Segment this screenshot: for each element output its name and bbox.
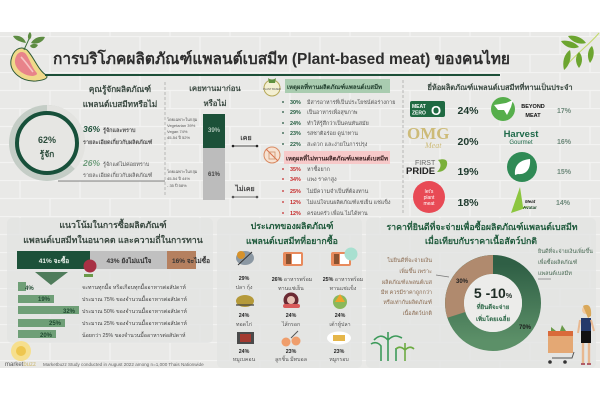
brand: Meat Zero: O xyxy=(431,103,441,118)
labels: product types: 23% xyxy=(334,349,345,355)
bar labels: จะทานทุกมื้อ หรือเกือบทุกมื้ออาหารต่อสัปดาห์ xyxy=(82,283,186,291)
labels: product types: 29% xyxy=(239,276,250,282)
list: reasons not to eat: 34% xyxy=(290,177,301,183)
list: reasons not to eat: 12% xyxy=(290,211,301,217)
label: no: ไม่เคย xyxy=(234,184,255,193)
note: never eaten groups: - 35 ปี 58% xyxy=(167,183,187,188)
list: reasons to eat: ทำให้รู้สึกว่าเป็นคนทันสมัย xyxy=(307,119,369,127)
donut: 62 percent aware: 62% xyxy=(38,135,56,145)
labels: product types: ทานแช่แข็ง xyxy=(330,284,357,292)
labels: product types: ไส้กรอก xyxy=(281,320,300,328)
stacked bar: ever eaten xyxy=(203,114,225,200)
stat: 26 percent: รู้จักแต่ไม่ค่อยทราบ xyxy=(103,161,150,168)
panel: awareness: แพลนต์เบสมีทหรือไม่ xyxy=(83,99,157,109)
heading: price: ราคาที่ยินดีที่จะจ่ายเพื่อซื้อผลิตภัณฑ์แพลนต์เบสมีท xyxy=(386,220,578,232)
bar values: 19% xyxy=(38,297,51,303)
bar labels: ประมาณ 75% ของจำนวนมื้ออาหารต่อสัปดาห์ xyxy=(82,295,187,303)
note: never eaten groups: โดยเฉพาะในกลุ่ม xyxy=(167,169,198,175)
donut center text: เพิ่มโดยเฉลี่ย xyxy=(476,314,510,323)
donut: willingness to pay: 70% xyxy=(519,325,532,331)
note: ever eaten groups: 45-54 ปี 52% xyxy=(167,135,190,140)
brand percentages: 14% xyxy=(556,200,571,207)
icon: woman shopper xyxy=(578,305,594,364)
brand percentages: 15% xyxy=(557,169,572,176)
labels: product types: หมูกรอบ xyxy=(329,357,349,363)
list: reasons not to eat: 35% xyxy=(290,167,301,173)
panel: product types: แพลนต์เบสมีทที่อยากซื้อ xyxy=(246,234,338,246)
brand: Harvest Gourmet: Harvest xyxy=(504,129,539,140)
brand: First Pride xyxy=(406,159,447,177)
arrow: down xyxy=(35,272,68,285)
bar labels: ประมาณ 25% ของจำนวนมื้ออาหารต่อสัปดาห์ xyxy=(82,319,187,327)
list: reasons to eat: 30% xyxy=(290,100,301,106)
stacked bar: ever eaten: 61% xyxy=(208,172,221,178)
stat: 26 percent: รายละเอียดเกี่ยวกับผลิตภัณฑ์ xyxy=(83,171,153,179)
list: reasons to eat: มีสารอาหารที่เป็นประโยชน์ต่อร่างกาย xyxy=(307,98,395,106)
panel: reasons xyxy=(263,78,395,217)
labels: product types: ทานแช่เย็น xyxy=(278,284,304,292)
brand: Beyond Meat: BEYOND xyxy=(521,104,545,110)
brand percentages: 17% xyxy=(557,108,572,115)
stat: 26 percent xyxy=(82,158,153,179)
labels: product types: 26% อาหารพร้อม xyxy=(272,276,312,283)
heading: awareness: คุณรู้จักผลิตภัณฑ์ xyxy=(89,84,151,95)
heading: future purchase: แนวโน้มในการซื้อผลิตภัณฑ์ xyxy=(59,218,167,230)
note: ever eaten groups: โดยเฉพาะในกลุ่ม xyxy=(167,117,198,123)
list: reasons to eat: 23% xyxy=(290,131,301,137)
list: reasons not to eat: 12% xyxy=(290,200,301,206)
brand: OMG Meat: Meat xyxy=(424,141,442,150)
stat: 36 percent: รู้จักและทราบ xyxy=(103,126,136,135)
panel: ever eaten: หรือไม่ xyxy=(203,98,227,108)
bar values: 32% xyxy=(63,309,76,315)
bars: eating frequency xyxy=(18,282,79,338)
callout: willing: เพื่อซื้อผลิตภัณฑ์ xyxy=(538,258,578,266)
list: reasons to eat: 29% xyxy=(290,110,301,116)
note: never eaten groups: 45-54 ปี 44% xyxy=(167,176,190,181)
bar labels: น้อยกว่า 25% ของจำนวนมื้ออาหารต่อสัปดาห์ xyxy=(82,331,186,339)
icon: fried chicken xyxy=(236,295,254,307)
panel: ever eaten xyxy=(167,84,258,200)
brand: Meat Avatar xyxy=(511,187,537,213)
list: reasons not to eat: ไม่มีความจำเป็นที่ต้องทาน xyxy=(306,187,369,195)
icon: frozen ready meal xyxy=(331,248,358,266)
list: reasons not to eat: 25% xyxy=(290,189,301,195)
callout: not willing: เนื้อสัตว์ปกติ xyxy=(403,309,432,317)
icons: product types xyxy=(236,248,358,346)
icon: plants xyxy=(371,332,414,361)
icon: meat xyxy=(84,260,96,277)
heading: ever eaten: เคยทานมาก่อน xyxy=(189,84,241,93)
brand: Meat Avatar: Avatar xyxy=(523,205,537,210)
label: yes: เคย xyxy=(240,135,252,142)
bar values: 25% xyxy=(49,321,62,327)
note: ever eaten groups: Vegan 74% xyxy=(167,129,188,134)
labels: product types: 24% xyxy=(286,313,297,319)
donut center text: 5 -10% xyxy=(474,285,513,301)
icon: shopping cart xyxy=(548,325,574,364)
list: reasons to eat: สะดวก และง่ายในการปรุง xyxy=(307,140,368,148)
callout: willing: แพลนต์เบสมีท xyxy=(538,270,572,277)
icon: bacon xyxy=(237,332,254,344)
icon: meatballs xyxy=(282,331,300,346)
bar values: 4% xyxy=(25,286,34,292)
brand percentages: 19% xyxy=(457,166,479,178)
callout: willing xyxy=(537,247,593,277)
logo: marketbuzz: marketbuzz xyxy=(5,362,36,368)
labels: product types: 24% xyxy=(239,349,250,355)
stacked bar: purchase intent: 43% ยังไม่แน่ใจ xyxy=(107,256,152,265)
list: reasons to eat xyxy=(282,98,395,148)
panel: future purchase xyxy=(17,218,210,339)
icon: fish and shrimp xyxy=(236,251,254,265)
labels: product types: 24% xyxy=(239,313,250,319)
brand percentages: 20% xyxy=(457,136,479,148)
brand: Let's Plant Meat xyxy=(413,181,445,213)
brand: Beyond Meat: MEAT xyxy=(525,113,541,119)
brand: Beyond Meat xyxy=(491,97,545,121)
panel: price xyxy=(371,220,594,364)
panel: future purchase: แพลนต์เบสมีทในอนาคต และความถี่ในการทาน xyxy=(23,233,203,245)
labels: product types: ปลา กุ้ง xyxy=(236,284,253,291)
list: reasons not to eat xyxy=(282,165,391,217)
brand percentages xyxy=(457,105,572,209)
donut: 62 percent aware xyxy=(9,105,85,181)
brand: First Pride: PRIDE xyxy=(406,166,435,177)
brand: Meat Zero: ZERO xyxy=(412,110,426,116)
stacked bar: ever eaten: 39% xyxy=(208,128,221,134)
donut: 62 percent aware: รู้จัก xyxy=(40,149,54,160)
list: reasons not to eat: ไม่แน่ใจบนผลิตภัณฑ์แช่เย็น แช่แข็ง xyxy=(306,198,391,206)
callout: not willing: ไม่ยินดีที่จะจ่ายเงิน xyxy=(386,256,432,264)
callout: not willing: เพิ่มขึ้น เพราะ xyxy=(399,267,432,275)
list: reasons to eat: 22% xyxy=(290,142,301,148)
labels: product types: ลูกชิ้น มีทบอล xyxy=(275,355,307,363)
icon: no plant based xyxy=(264,147,280,163)
title underline xyxy=(45,74,500,76)
heading: product types: ประเภทของผลิตภัณฑ์ xyxy=(251,220,333,231)
stat: 36 percent xyxy=(83,124,153,146)
callout: not willing: มีท ควรมีราคาถูกกว่า xyxy=(381,289,432,296)
labels: product types: 23% xyxy=(286,349,297,355)
brand: Harvest Gourmet: Gourmet xyxy=(509,140,533,146)
icon: fish tofu xyxy=(333,294,347,309)
stacked bar: purchase intent: 41% จะซื้อ xyxy=(39,255,69,265)
source note: Marketbuzz Study conducted in August 2022 among n=1,000 Thais Nationwide xyxy=(43,362,204,367)
donut: willingness to pay xyxy=(445,255,532,342)
labels: product types: 24% xyxy=(335,313,346,319)
brand percentages: 24% xyxy=(457,105,479,117)
list: reasons to eat: 24% xyxy=(290,121,301,127)
list: reasons not to eat: หาซื้อยาก xyxy=(307,165,330,173)
donut center text xyxy=(474,285,513,323)
icon: plant based badge: PLANT BASED xyxy=(263,87,281,91)
brand percentages: 18% xyxy=(457,197,479,209)
list: reasons not to eat: แพง ราคาสูง xyxy=(307,176,337,183)
brand: OMG Meat: OMG xyxy=(407,124,450,143)
labels: product types xyxy=(233,276,363,363)
labels: product types: ทอดไก่ xyxy=(236,320,252,328)
labels: product types: เต้าหู้ปลา xyxy=(329,321,351,328)
bar values: 20% xyxy=(40,333,53,339)
bar labels: ประมาณ 50% ของจำนวนมื้ออาหารต่อสัปดาห์ xyxy=(82,307,187,315)
stacked bar: purchase intent: 16% จะไม่ซื้อ xyxy=(172,255,210,265)
icon: chilled ready meal xyxy=(283,252,303,266)
list: reasons to eat: รสชาติอร่อย ดูน่าทาน xyxy=(307,130,358,137)
brand: Meat Zero xyxy=(410,101,445,118)
brand: First Pride: FIRST xyxy=(415,160,436,167)
note: ever eaten groups: Vegetarian 39% xyxy=(167,123,196,128)
stat: 26 percent: 26% xyxy=(82,158,100,168)
panel: brands xyxy=(406,81,573,213)
list: reasons to eat: เป็นอาหารเพื่อสุขภาพ xyxy=(307,108,358,116)
donut: willingness to pay: 30% xyxy=(456,279,469,285)
brand percentages: 16% xyxy=(557,139,572,146)
panel: awareness xyxy=(9,84,165,181)
brand: Never Meat xyxy=(507,152,537,182)
panel: price background xyxy=(366,218,596,368)
panel: product types background xyxy=(217,218,362,368)
callout: willing: ยินดีที่จะจ่ายเงินเพิ่มขึ้น xyxy=(537,247,593,255)
stacked bar: purchase intent xyxy=(17,251,210,269)
note: ever eaten groups xyxy=(167,117,198,140)
panel: future purchase background xyxy=(7,218,213,343)
brand: Let's Plant Meat: plant xyxy=(424,195,435,201)
brand: Harvest Gourmet xyxy=(504,129,539,146)
icon: crispy pork xyxy=(327,332,351,344)
logo: marketbuzz xyxy=(5,341,36,368)
brand: Let's Plant Meat: let's xyxy=(425,189,434,195)
note: never eaten groups xyxy=(167,169,198,188)
callout: not willing: ผลิตภัณฑ์แพลนต์เบส xyxy=(382,279,433,286)
icon: sausage xyxy=(283,292,300,308)
labels: product types: หมูเบคอน xyxy=(233,357,256,363)
stat: 36 percent: รายละเอียดเกี่ยวกับผลิตภัณฑ์ xyxy=(83,138,153,146)
brand: Let's Plant Meat: meat xyxy=(423,201,435,207)
icon: meat with leaves xyxy=(11,32,47,81)
donut center text: ที่ยินดีจะจ่าย xyxy=(477,302,510,311)
header: reasons not to eat: เหตุผลที่ไม่ทานผลิตภัณฑ์แพลนต์เบสมีท xyxy=(286,154,388,162)
brand: Meat Avatar: Meat xyxy=(525,199,536,204)
bar labels xyxy=(82,283,187,339)
panel: product types xyxy=(233,220,363,363)
brand: Meat Zero: MEAT xyxy=(412,104,426,110)
list: reasons not to eat: ครอบครัว เพื่อน ไม่ได้ทาน xyxy=(307,209,368,217)
callout: not willing: หรือเท่ากับผลิตภัณฑ์ xyxy=(383,299,432,306)
callout: not willing xyxy=(381,256,433,317)
icon: leaves top right xyxy=(561,33,599,70)
header: reasons to eat: เหตุผลที่ทานผลิตภัณฑ์แพลนต์เบสมีท xyxy=(287,82,382,91)
panel: price: เมื่อเทียบกับราคาเนื้อสัตว์ปกติ xyxy=(425,234,537,246)
stat: 36 percent: 36% xyxy=(83,124,100,134)
title: การบริโภคผลิตภัณฑ์แพลนต์เบสมีท (Plant-based meat) ของคนไทย xyxy=(53,49,510,68)
bar values xyxy=(25,286,76,339)
heading: brands: ยี่ห้อผลิตภัณฑ์แพลนต์เบสมีทที่ทานเป็นประจำ xyxy=(427,81,573,92)
pointer line xyxy=(58,180,165,182)
labels: product types: 25% อาหารพร้อม xyxy=(323,276,363,283)
